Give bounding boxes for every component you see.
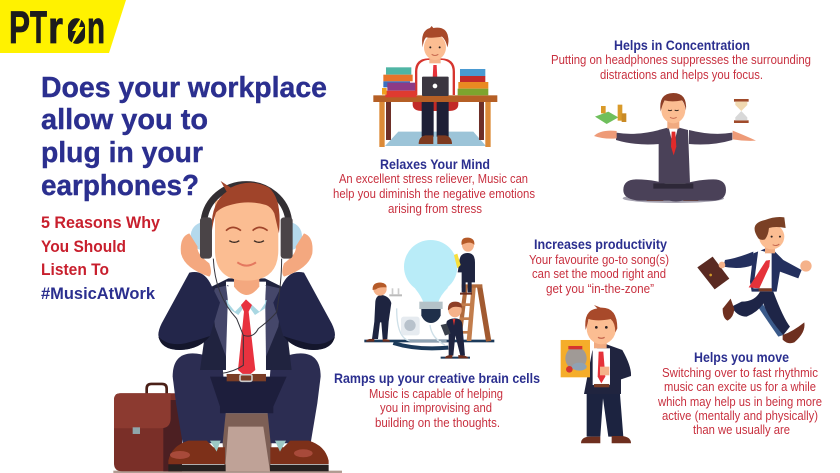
heading and text: helps you move: which may help us in being more — [657, 395, 822, 409]
heading and text: increases productivity — [529, 236, 669, 296]
title: earphones? — [41, 170, 199, 202]
heading and text: helps in concentration: distractions and helps you focus. — [600, 68, 763, 82]
heading and text: ramps up your creative brain cells: you in improvising and — [380, 401, 492, 415]
logo: PTron badge: r — [48, 2, 63, 53]
heading and text: relaxes your mind: Relaxes Your Mind — [380, 156, 490, 172]
subtitle — [41, 213, 161, 303]
heading and text: helps you move: Switching over to fast rhythmic — [662, 366, 818, 380]
heading and text: ramps up your creative brain cells: building on the thoughts. — [375, 416, 500, 430]
logo: PTron badge: T — [30, 2, 47, 53]
heading and text: helps in concentration — [551, 37, 811, 82]
logo: PTron badge — [0, 0, 126, 53]
subtitle: You Should — [41, 237, 126, 256]
subtitle: 5 Reasons Why — [41, 213, 161, 232]
heading and text: ramps up your creative brain cells: Ramps up your creative brain cells — [334, 370, 540, 386]
heading and text: increases productivity: Increases productivity — [534, 236, 667, 252]
heading and text: increases productivity: Your favourite go-to song(s) — [529, 253, 669, 267]
heading and text: increases productivity: can set the mood right and — [532, 267, 666, 281]
title: Does your workplace — [41, 72, 327, 104]
heading and text: helps in concentration: Putting on headphones suppresses the surrounding — [551, 53, 811, 67]
logo: PTron badge: P — [9, 2, 30, 53]
illustration: man at desk with laptop and books — [373, 26, 497, 147]
title: allow you to — [41, 104, 208, 136]
heading and text: helps in concentration: Helps in Concentration — [614, 37, 750, 53]
title — [41, 72, 327, 202]
heading and text: helps you move: active (mentally and physically) — [662, 409, 818, 423]
heading and text: relaxes your mind — [333, 156, 535, 216]
heading and text: ramps up your creative brain cells: Music is capable of helping — [369, 387, 503, 401]
illustration: running man with briefcase — [697, 217, 812, 343]
illustration: man holding certificate with thumbs up — [561, 305, 631, 443]
heading and text: helps you move: Helps you move — [694, 349, 789, 365]
heading and text: relaxes your mind: arising from stress — [388, 202, 482, 216]
subtitle: Listen To — [41, 260, 109, 279]
heading and text: helps you move — [657, 349, 822, 437]
title: plug in your — [41, 137, 203, 169]
subtitle: #MusicAtWork — [41, 284, 156, 303]
heading and text: relaxes your mind: An excellent stress reliever, Music can — [339, 172, 528, 186]
logo: PTron badge: n — [87, 2, 105, 53]
heading and text: relaxes your mind: help you diminish the negative emotions — [333, 187, 535, 201]
logo: PTron badge: o — [67, 2, 86, 53]
illustration: team with giant light bulb, ladder and socket — [364, 238, 494, 359]
heading and text: ramps up your creative brain cells — [334, 370, 540, 430]
illustration: meditating man balancing money and hourglass — [594, 93, 756, 203]
illustration: man listening on headphones with briefcase — [113, 181, 342, 473]
heading and text: helps you move: than we usually are — [693, 423, 790, 437]
heading and text: increases productivity: get you “in-the-zone” — [546, 282, 654, 296]
heading and text: helps you move: music can excite us for a while — [664, 380, 816, 394]
